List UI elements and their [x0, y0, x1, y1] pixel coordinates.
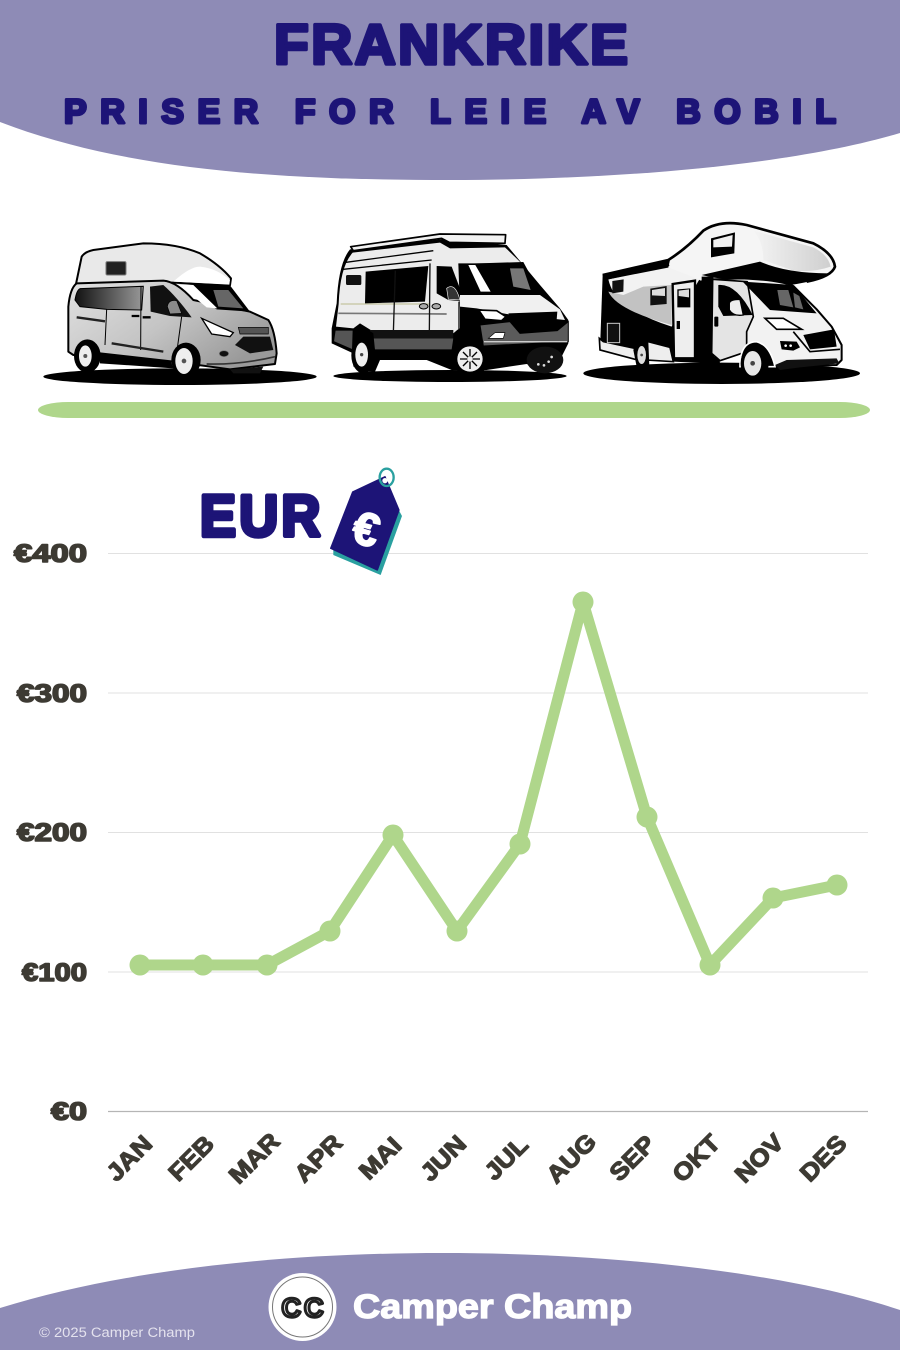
y axis labels: €0 — [51, 1098, 87, 1126]
logo badge — [268, 1273, 336, 1341]
x axis labels: AUG — [541, 1128, 602, 1189]
x axis labels: MAI — [354, 1132, 407, 1185]
footer banner — [0, 1253, 900, 1350]
logo badge: CC — [282, 1293, 324, 1323]
brand name: Camper Champ — [353, 1288, 632, 1326]
y axis labels: €200 — [17, 819, 87, 847]
x axis labels: JUL — [480, 1132, 534, 1186]
x axis labels: NOV — [730, 1129, 789, 1188]
icon: panel van — [332, 234, 568, 382]
y axis labels: €100 — [22, 959, 87, 987]
x axis labels — [102, 1128, 852, 1189]
currency label: EUR — [200, 483, 324, 548]
icon: euro price tag — [331, 469, 402, 575]
green divider bar — [38, 402, 870, 418]
x axis labels: JUN — [416, 1131, 472, 1187]
x axis labels: MAR — [224, 1128, 285, 1189]
x axis labels: SEP — [605, 1131, 661, 1187]
subtitle: PRISER FOR LEIE AV BOBIL — [64, 93, 836, 131]
x axis labels: OKT — [668, 1129, 726, 1188]
title: FRANKRIKE — [274, 13, 628, 77]
icon: alcove motorhome — [583, 223, 860, 384]
header banner — [0, 0, 900, 180]
line chart: monthly prices — [14, 540, 868, 1189]
copyright: © 2025 Camper Champ — [39, 1325, 195, 1340]
x axis labels: DES — [795, 1130, 852, 1187]
x axis labels: JAN — [102, 1131, 158, 1187]
icon: campervan with high roof — [43, 243, 317, 385]
x axis labels: FEB — [164, 1131, 220, 1187]
x axis labels: APR — [290, 1130, 348, 1188]
y axis labels: €400 — [14, 540, 87, 568]
y axis labels — [14, 540, 87, 1126]
icon: euro price tag: € — [347, 501, 385, 558]
data line — [140, 602, 837, 965]
data points — [130, 592, 848, 976]
y axis labels: €300 — [17, 680, 87, 708]
